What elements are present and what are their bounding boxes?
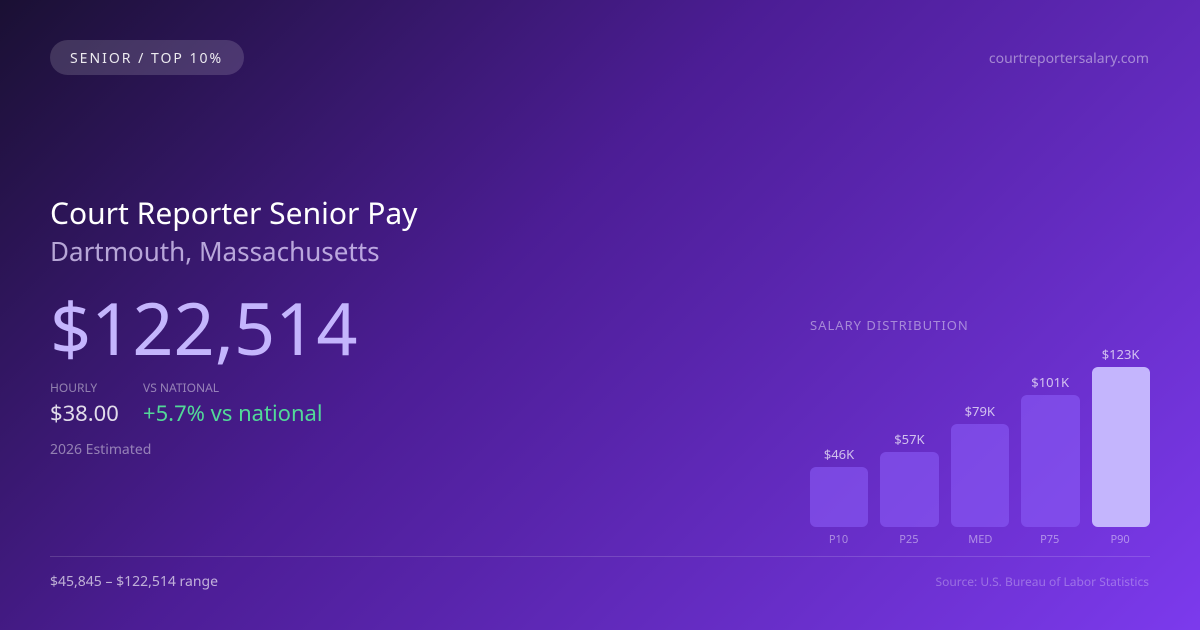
bar: P25: $57K (894, 430, 925, 448)
stat: hourly (50, 379, 119, 428)
stat: hourly: HOURLY (50, 379, 97, 396)
bar: median: $79K (965, 402, 995, 420)
bar: P25: P25 (899, 532, 919, 547)
range text: $45,845 – $122,514 range (50, 572, 218, 591)
bar chart: salary distribution (810, 345, 1150, 547)
estimate note: 2026 Estimated (50, 440, 151, 459)
chart heading: SALARY DISTRIBUTION (810, 316, 969, 334)
bar: P75: P75 (1040, 532, 1059, 547)
subtitle: location: Dartmouth, Massachusetts (50, 233, 380, 269)
bar: P75: $101K (1031, 373, 1069, 391)
bar: P90 (1092, 345, 1150, 547)
main salary figure: $122,514 (50, 279, 358, 377)
bar: P75 (1021, 373, 1080, 547)
bar: P25 (880, 430, 939, 547)
bar: P90: P90 (1110, 532, 1130, 547)
badge: senior / top 10%: SENIOR / TOP 10% (70, 49, 223, 68)
badge: senior / top 10% (50, 40, 244, 75)
bar: P10 (810, 445, 868, 547)
stat: vs national: VS NATIONAL (143, 379, 219, 396)
source note: Source: U.S. Bureau of Labor Statistics (936, 573, 1149, 590)
bar: P10: P10 (829, 532, 848, 547)
site name: courtreportersalary.com (989, 49, 1149, 68)
title: Court Reporter Senior Pay (50, 192, 417, 233)
stat: vs national (143, 379, 323, 428)
bar: P10: $46K (824, 445, 854, 463)
stat: vs national: +5.7% vs national (143, 398, 323, 428)
bar: median: MED (968, 532, 992, 547)
bar: P90: $123K (1102, 345, 1139, 363)
stat: hourly: $38.00 (50, 398, 119, 428)
bar: median (951, 402, 1009, 547)
